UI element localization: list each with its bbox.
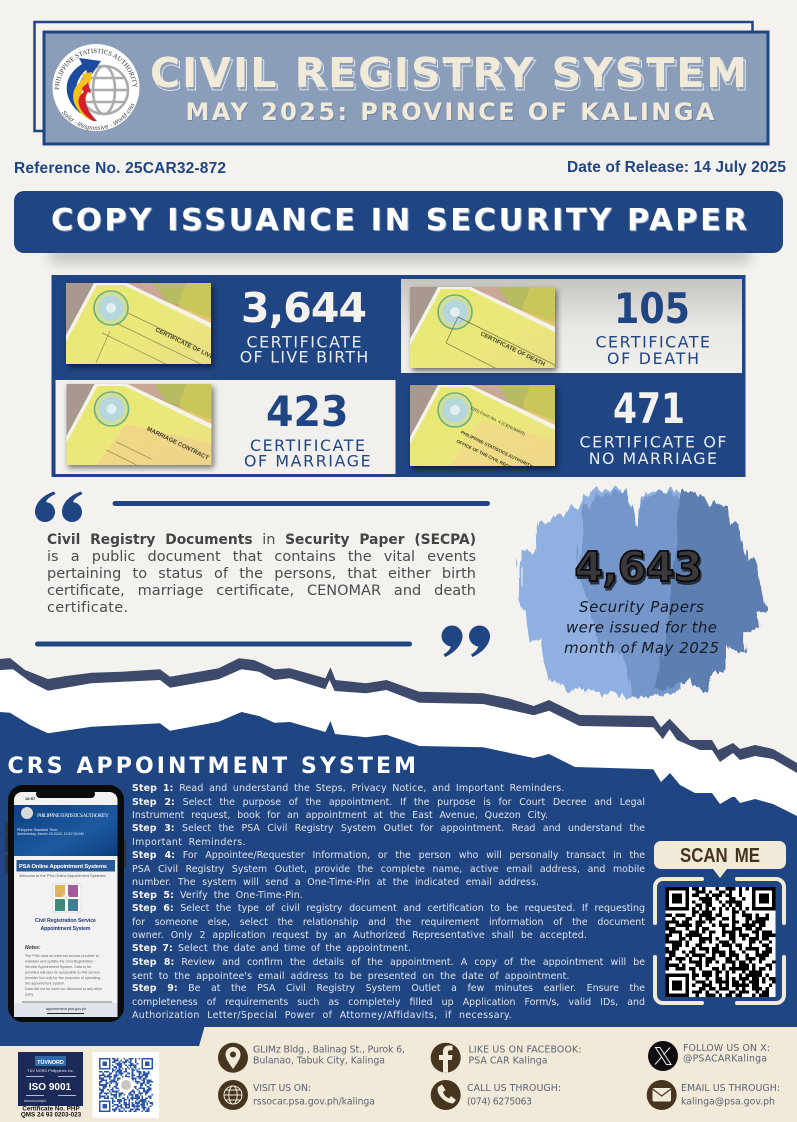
telephone text — [467, 1083, 561, 1108]
panel: death background — [401, 279, 742, 373]
text block: SECPA definition: certificate, marriage certificate, CENOMAR and death — [47, 583, 476, 599]
phone screen heading: PSA Online Appointment Systems — [19, 864, 107, 870]
text block: appointment steps: number. The system will send a One-Time-Pin at the indicated email address. — [132, 877, 539, 888]
icon: closing quote — [442, 626, 490, 657]
QR code: website — [92, 1052, 159, 1118]
text block: appointment steps: Step 7: Select the date and time of the appointment. — [132, 943, 411, 954]
text block: appointment steps: Step 5: Verify the One-Time-Pin. — [132, 890, 303, 901]
text block: appointment steps: Authorization Letter/Special Power of Attorney/Affidavits, if necessary. — [132, 1010, 512, 1021]
phone service title: Appointment System — [40, 926, 91, 932]
text block: appointment steps: Step 2: Select the purpose of the appointment. If the purpose is for Court Decree and Legal — [132, 797, 645, 808]
icon: facebook — [431, 1043, 461, 1073]
icon: opening quote — [35, 492, 82, 522]
address text — [253, 1044, 405, 1066]
heading: CRS appointment system: CRS APPOINTMENT SYSTEM — [8, 754, 416, 779]
certification badge: tuvnord.com/ph — [24, 1099, 46, 1103]
brush blob: total — [520, 488, 768, 697]
text block: appointment steps: Step 3: Select the PSA Civil Registry System Outlet for appointment. Read and understand the — [132, 823, 645, 834]
banner: copy issuance: COPY ISSUANCE IN SECURITY PAPER — [51, 203, 747, 238]
phone notes: Notes: — [25, 945, 41, 951]
title: civil registry system: CIVIL REGISTRY SYSTEM — [150, 49, 747, 97]
phone mockup — [6, 785, 126, 1022]
text block: SECPA definition — [47, 532, 476, 616]
stat: no marriage — [410, 384, 726, 478]
icon: location pin — [218, 1043, 248, 1073]
phone notes: provider but only for the purposes of operating — [25, 976, 100, 980]
caption: security papers: were issued for the — [566, 618, 717, 636]
certificate number: Certificate No. PHP — [22, 1106, 80, 1112]
icon: globe — [218, 1080, 248, 1110]
footer background — [0, 1027, 797, 1122]
facebook text — [468, 1044, 582, 1066]
quote rule bottom — [35, 642, 412, 646]
stat: death — [410, 284, 710, 373]
address text: GLIMz Bldg., Balinag St., Purok 6, — [253, 1044, 405, 1056]
image: CENOMAR: PHILIPPINE STATISTICS AUTHORITY — [460, 430, 533, 469]
icon: X — [648, 1041, 678, 1071]
number: 105: 105 — [614, 284, 690, 333]
image: marriage certificate: MARRIAGE CONTRACT — [146, 426, 210, 462]
text block: SECPA definition: is a public document that contains the vital events — [47, 549, 476, 565]
contact: X — [648, 1041, 770, 1071]
image: CENOMAR: OFFICE OF THE CIVIL REGISTRAR — [456, 439, 526, 476]
text block: appointment steps: Step 6: Select the type of civil registry document and certification to be requested. If requesting — [132, 903, 645, 914]
phone service title: Civil Registration Service — [35, 918, 96, 924]
phone header — [14, 805, 118, 856]
label: death — [596, 333, 710, 368]
QR code brackets — [655, 879, 784, 1003]
stat: live birth — [66, 283, 368, 370]
text block: appointment steps: Important Reminders. — [132, 836, 246, 848]
text block: appointment steps: Instrument request, book for an appointment at the East Avenue, Quezon City. — [132, 810, 548, 821]
X text: @PSACARKalinga — [683, 1054, 767, 1064]
text block: appointment steps: completeness of requirements such as completely filled up Application Form/s, valid IDs, and — [132, 996, 645, 1008]
contact: address — [218, 1043, 405, 1073]
telephone text: CALL US THROUGH: — [467, 1083, 561, 1094]
header: title panel — [42, 30, 770, 146]
text block: appointment steps — [132, 783, 645, 1021]
image: CENOMAR — [410, 385, 555, 476]
phone notes: maintain and update the Civil Registration — [25, 960, 93, 964]
label: marriage: CERTIFICATE — [250, 436, 365, 455]
certificate number: QMS 24 93 0203-023 — [21, 1112, 82, 1118]
number: 471: 471 — [613, 384, 685, 433]
quote rule top — [112, 501, 490, 506]
panel: certificate statistics — [52, 275, 746, 478]
text block: SECPA definition: pertaining to status of the persons, that either birth — [47, 566, 476, 582]
subtitle: MAY 2025: PROVINCE OF KALINGA — [186, 98, 715, 126]
banner: copy issuance — [14, 191, 783, 253]
number: 4,643: 4,643 — [574, 543, 702, 591]
image: birth certificate: CERTIFICATE OF LIVE BIRTH — [154, 327, 232, 370]
certification badge: TÜV NORD Philippines Inc. — [27, 1069, 74, 1073]
icon: envelope — [647, 1080, 677, 1110]
image: death certificate — [410, 287, 555, 368]
image: marriage certificate — [66, 384, 212, 465]
label: live birth — [240, 332, 368, 367]
phone notes: The PSA uses an external service provider to — [25, 954, 99, 958]
X text: FOLLOW US ON X: — [683, 1043, 770, 1054]
caption: security papers — [564, 598, 719, 657]
subtitle: MAY 2025: PROVINCE OF KALINGA — [186, 99, 716, 127]
banner: copy issuance: COPY ISSUANCE IN SECURITY PAPER — [52, 204, 748, 239]
text block: SECPA definition: certificate. — [47, 600, 128, 616]
contact: telephone — [431, 1080, 561, 1110]
label: marriage — [244, 436, 371, 471]
phone service title — [35, 918, 96, 932]
phone notes: Service Appointment System. Data to be — [25, 965, 91, 969]
phone notes: the appointment system. — [25, 982, 65, 986]
label: live birth: CERTIFICATE — [246, 332, 362, 351]
title: civil registry system: CIVIL REGISTRY SYSTEM — [152, 52, 749, 100]
header: back frame — [34, 22, 752, 131]
text block: appointment steps: Step 8: Review and confirm the details of the appointment. A copy of the appointment will be — [132, 957, 645, 968]
logo ring text: PHILIPPINE STATISTICS AUTHORITY — [54, 48, 138, 90]
date of release: Date of Release: 14 July 2025 — [567, 159, 786, 176]
text block: appointment steps: sent to the appointee's email address to be presented on the date of appointment. — [132, 970, 570, 982]
torn edge: dark band — [0, 658, 797, 790]
phone icon: folders — [53, 884, 81, 912]
certification badge — [18, 1052, 83, 1118]
stat: marriage — [66, 384, 371, 471]
phone header: Wednesday, March 26 2025, 10:57:53 AM — [17, 832, 84, 836]
panel: marriage background — [56, 380, 396, 474]
text block: SECPA definition: Civil Registry Documents in Security Paper (SECPA) — [47, 532, 476, 548]
text block: appointment steps: for someone else, select the relationship and the requirement information of the document — [132, 917, 645, 928]
label: death: OF DEATH — [607, 349, 699, 368]
contact: website — [218, 1080, 375, 1110]
phone header: PHILIPPINE STATISTICS AUTHORITY — [37, 813, 109, 819]
certification badge: ISO 9001 — [29, 1082, 72, 1093]
image: birth certificate — [66, 283, 232, 370]
X text — [683, 1043, 770, 1064]
image: CENOMAR: CRS Form No. 4 (CENOMAR) — [470, 405, 527, 437]
address text: Bulanao, Tabuk City, Kalinga — [253, 1056, 385, 1066]
text block: appointment steps: Step 4: For Appointee/Requester Information, or the person who will personally transact in the — [132, 850, 645, 861]
number: 4,643: 4,643 — [576, 546, 704, 594]
website text: VISIT US ON: — [253, 1083, 311, 1094]
label: no marriage: NO MARRIAGE — [589, 449, 717, 468]
email text — [681, 1083, 780, 1108]
email text: EMAIL US THROUGH: — [681, 1083, 780, 1094]
phone notes — [25, 945, 103, 996]
text block: appointment steps: owner. Only 2 application request by an Authorized Representative shall be accepted. — [132, 930, 587, 941]
text block: appointment steps: PSA Civil Registry System Outlet, provide the complete name, active email address, and mobile — [132, 864, 645, 874]
website text — [253, 1083, 375, 1108]
icon: phone — [431, 1080, 461, 1110]
phone notes: party. — [25, 992, 34, 996]
phone notes: Data will not be used nor disclosed to any other — [25, 987, 103, 991]
phone url bar: appointment.psa.gov.ph — [46, 1007, 86, 1011]
panel: CRS appointment background — [0, 712, 797, 1050]
facebook text: PSA CAR Kalinga — [468, 1056, 548, 1066]
banner shadow decor — [50, 246, 750, 264]
facebook text: LIKE US ON FACEBOOK: — [468, 1044, 582, 1056]
certificate number — [21, 1106, 82, 1118]
text block: appointment steps: Step 9: Be at the PSA Civil Registry System Outlet a few minutes earlier. Ensure the — [132, 983, 645, 994]
contact: email — [647, 1080, 780, 1110]
phone notes: provided will also be accessible to this service — [25, 970, 100, 974]
phone header: Philippine Standard Time: — [17, 828, 58, 832]
certification badge: TÜVNORD — [37, 1059, 64, 1066]
text block: appointment steps: Step 1: Read and understand the Steps, Privacy Notice, and Important Reminders. — [132, 783, 564, 794]
telephone text: (074) 6275063 — [467, 1096, 532, 1108]
caption: security papers: Security Papers — [579, 598, 704, 616]
label: marriage: OF MARRIAGE — [244, 452, 371, 471]
scan me bubble — [654, 841, 786, 878]
label: no marriage — [580, 433, 726, 468]
scan me bubble: SCAN ME — [680, 844, 760, 867]
number: 423: 423 — [266, 387, 348, 436]
label: live birth: OF LIVE BIRTH — [240, 348, 368, 367]
image: death certificate: CERTIFICATE OF DEATH — [479, 331, 546, 368]
caption: security papers: month of May 2025 — [564, 639, 719, 657]
torn edge: white paper — [0, 669, 797, 830]
label: no marriage: CERTIFICATE OF — [580, 433, 726, 452]
label: death: CERTIFICATE — [596, 333, 710, 352]
QR code: appointment system — [666, 887, 776, 997]
contact: facebook — [431, 1043, 582, 1073]
icon: PSA logo — [52, 44, 140, 131]
website text: rssocar.psa.gov.ph/kalinga — [253, 1096, 375, 1108]
reference number: Reference No. 25CAR32-872 — [14, 160, 226, 177]
phone welcome text: Welcome to the PSA Online Appointment Systems! — [19, 874, 106, 878]
email text: kalinga@psa.gov.ph — [681, 1096, 775, 1108]
phone mockup: 10:57 — [25, 796, 36, 801]
number: 3,644: 3,644 — [241, 284, 367, 332]
